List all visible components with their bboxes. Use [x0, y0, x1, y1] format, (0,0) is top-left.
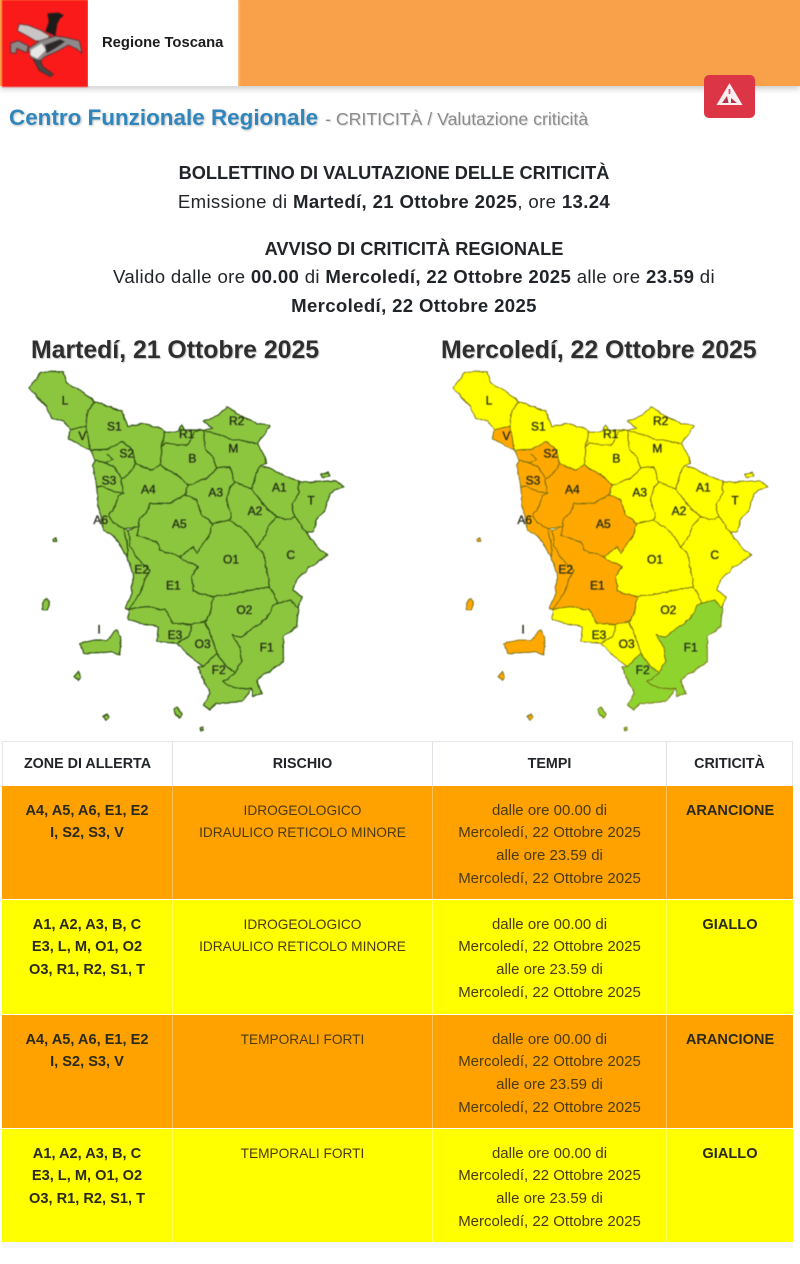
zone labels: A4: [141, 482, 156, 496]
zone labels: L: [62, 394, 69, 408]
row: orange hydrogeological: [2, 786, 793, 899]
zone labels: R2: [653, 414, 669, 428]
row: orange hydrogeological: A4, A5, A6, E1, E2: [25, 802, 149, 818]
zone labels: M: [228, 441, 238, 455]
validity text: Valido dalle ore 00.00 di Mercoledí, 22 Ottobre 2025 alle ore 23.59 di: [113, 266, 715, 287]
zone labels: L: [486, 394, 493, 408]
zone labels: M: [652, 441, 662, 455]
zone labels: A5: [172, 517, 187, 531]
zone labels: R1: [603, 427, 619, 441]
row: orange hydrogeological: IDRAULICO RETICOLO MINORE: [199, 825, 406, 840]
row: orange hydrogeological: IDROGEOLOGICO: [244, 802, 361, 818]
zone labels: T: [731, 494, 739, 508]
zone labels: F2: [212, 663, 226, 677]
logo: red square with pegasus: [1, 0, 89, 88]
zone labels: A6: [517, 513, 532, 527]
row: yellow thunderstorms: dalle ore 00.00 di: [492, 1144, 607, 1162]
icon: alert button: [704, 75, 755, 118]
zone labels: A4: [565, 482, 580, 496]
row: yellow thunderstorms: A1, A2, A3, B, C: [33, 1146, 141, 1162]
row: yellow hydrogeological: O3, R1, R2, S1, T: [29, 962, 145, 978]
row: orange thunderstorms: TEMPORALI FORTI: [241, 1032, 364, 1046]
zone labels: [486, 394, 739, 677]
zone labels: S2: [119, 446, 134, 460]
row: yellow hydrogeological: GIALLO: [702, 916, 758, 932]
alert table: [2, 741, 793, 1248]
zone labels: O3: [195, 637, 211, 651]
table header row: TEMPI: [528, 756, 571, 772]
row: orange hydrogeological: ARANCIONE: [686, 802, 774, 818]
row: orange thunderstorms: [2, 1015, 793, 1128]
emission date: Emissione di Martedí, 21 Ottobre 2025, ore 13.24: [178, 191, 610, 212]
zone labels: I: [97, 622, 101, 636]
zone labels: B: [612, 452, 620, 466]
zone labels: A3: [208, 485, 223, 499]
row: yellow hydrogeological: alle ore 23.59 di: [496, 961, 603, 978]
zone labels: I: [521, 622, 525, 636]
row: yellow thunderstorms: TEMPORALI FORTI: [241, 1146, 364, 1160]
row: yellow hydrogeological: IDRAULICO RETICOLO MINORE: [199, 939, 406, 954]
row: orange thunderstorms: I, S2, S3, V: [50, 1054, 124, 1070]
zone labels: V: [502, 429, 510, 443]
zone labels: E2: [558, 562, 573, 576]
zone labels: A6: [93, 513, 108, 527]
table bottom strip: [2, 1242, 793, 1248]
zone labels: R2: [229, 414, 245, 428]
header bar: [0, 0, 800, 86]
row: yellow thunderstorms: O3, R1, R2, S1, T: [29, 1191, 145, 1207]
row: orange thunderstorms: Mercoledí, 22 Ottobre 2025: [458, 1053, 641, 1070]
zone labels: A2: [672, 504, 687, 518]
logo text panel: [88, 0, 238, 86]
zone labels: S3: [102, 474, 117, 488]
row: orange hydrogeological: I, S2, S3, V: [50, 825, 124, 841]
row: orange thunderstorms: A4, A5, A6, E1, E2: [25, 1032, 149, 1048]
zone labels: O2: [236, 603, 253, 617]
map title: Tuesday: Martedí, 21 Ottobre 2025: [31, 337, 319, 364]
row: yellow hydrogeological: E3, L, M, O1, O2: [32, 939, 142, 955]
notice title: AVVISO DI CRITICITÀ REGIONALE: [265, 239, 563, 259]
zone labels: A1: [272, 481, 287, 495]
row: orange hydrogeological: dalle ore 00.00 di: [492, 802, 607, 818]
zone labels: S1: [107, 420, 122, 434]
zone labels: E1: [590, 579, 605, 593]
zone labels: B: [188, 452, 196, 466]
map title: Wednesday: Mercoledí, 22 Ottobre 2025: [441, 337, 757, 364]
row: yellow thunderstorms: alle ore 23.59 di: [496, 1190, 603, 1207]
zone labels: O2: [660, 603, 677, 617]
map: Tuscany alert zones, Tuesday: [28, 370, 346, 732]
row: yellow hydrogeological: A1, A2, A3, B, C: [33, 916, 141, 932]
row: yellow hydrogeological: [2, 900, 793, 1014]
row: yellow hydrogeological: Mercoledí, 22 Ottobre 2025: [458, 938, 641, 955]
table header row: ZONE DI ALLERTA: [24, 756, 151, 772]
row: yellow hydrogeological: IDROGEOLOGICO: [244, 916, 361, 932]
map: Tuscany alert zones, Wednesday: [452, 370, 769, 732]
zone labels: C: [286, 548, 295, 562]
row: yellow thunderstorms: Mercoledí, 22 Ottobre 2025: [458, 1167, 641, 1184]
row: orange thunderstorms: Mercoledí, 22 Ottobre 2025: [458, 1099, 641, 1116]
table header row: RISCHIO: [273, 756, 332, 772]
logo text panel: Regione Toscana: [102, 35, 223, 51]
zone labels: A5: [596, 517, 611, 531]
zone labels: S3: [526, 474, 541, 488]
zone labels: T: [307, 494, 315, 508]
zone labels: [62, 394, 315, 677]
zone labels: F1: [684, 640, 698, 654]
zone labels: F1: [260, 640, 274, 654]
row: orange thunderstorms: ARANCIONE: [686, 1032, 774, 1048]
zone labels: A1: [696, 481, 711, 495]
row: yellow thunderstorms: E3, L, M, O1, O2: [32, 1168, 142, 1184]
zone labels: O3: [619, 637, 635, 651]
zone labels: E3: [592, 628, 607, 642]
zone labels: F2: [636, 663, 650, 677]
row: orange thunderstorms: dalle ore 00.00 di: [492, 1030, 607, 1048]
row: yellow thunderstorms: GIALLO: [702, 1146, 758, 1162]
zone labels: A3: [632, 485, 647, 499]
table header row: [2, 741, 793, 786]
row: yellow hydrogeological: dalle ore 00.00 di: [492, 916, 607, 932]
zone labels: R1: [179, 427, 195, 441]
row: orange hydrogeological: Mercoledí, 22 Ottobre 2025: [458, 870, 641, 887]
zone labels: V: [78, 429, 86, 443]
row: orange thunderstorms: alle ore 23.59 di: [496, 1076, 603, 1093]
row: orange hydrogeological: Mercoledí, 22 Ottobre 2025: [458, 824, 641, 841]
zone labels: E3: [168, 628, 183, 642]
zone labels: S2: [543, 446, 558, 460]
zone labels: C: [710, 548, 719, 562]
zone labels: E2: [134, 562, 149, 576]
table header row: CRITICITÀ: [694, 756, 765, 772]
validity text second line: Mercoledí, 22 Ottobre 2025: [291, 295, 537, 316]
page heading: Centro Funzionale Regionale - CRITICITÀ / Valutazione criticità: [9, 105, 588, 130]
zone labels: S1: [531, 420, 546, 434]
row: yellow thunderstorms: [2, 1129, 793, 1242]
zone labels: O1: [223, 552, 239, 566]
row: yellow thunderstorms: Mercoledí, 22 Ottobre 2025: [458, 1213, 641, 1230]
row: yellow hydrogeological: Mercoledí, 22 Ottobre 2025: [458, 984, 641, 1001]
row: orange hydrogeological: alle ore 23.59 di: [496, 847, 603, 864]
zone labels: O1: [647, 552, 663, 566]
bulletin title: BOLLETTINO DI VALUTAZIONE DELLE CRITICITÀ: [179, 163, 609, 183]
zone labels: A2: [248, 504, 263, 518]
zone labels: E1: [166, 579, 181, 593]
